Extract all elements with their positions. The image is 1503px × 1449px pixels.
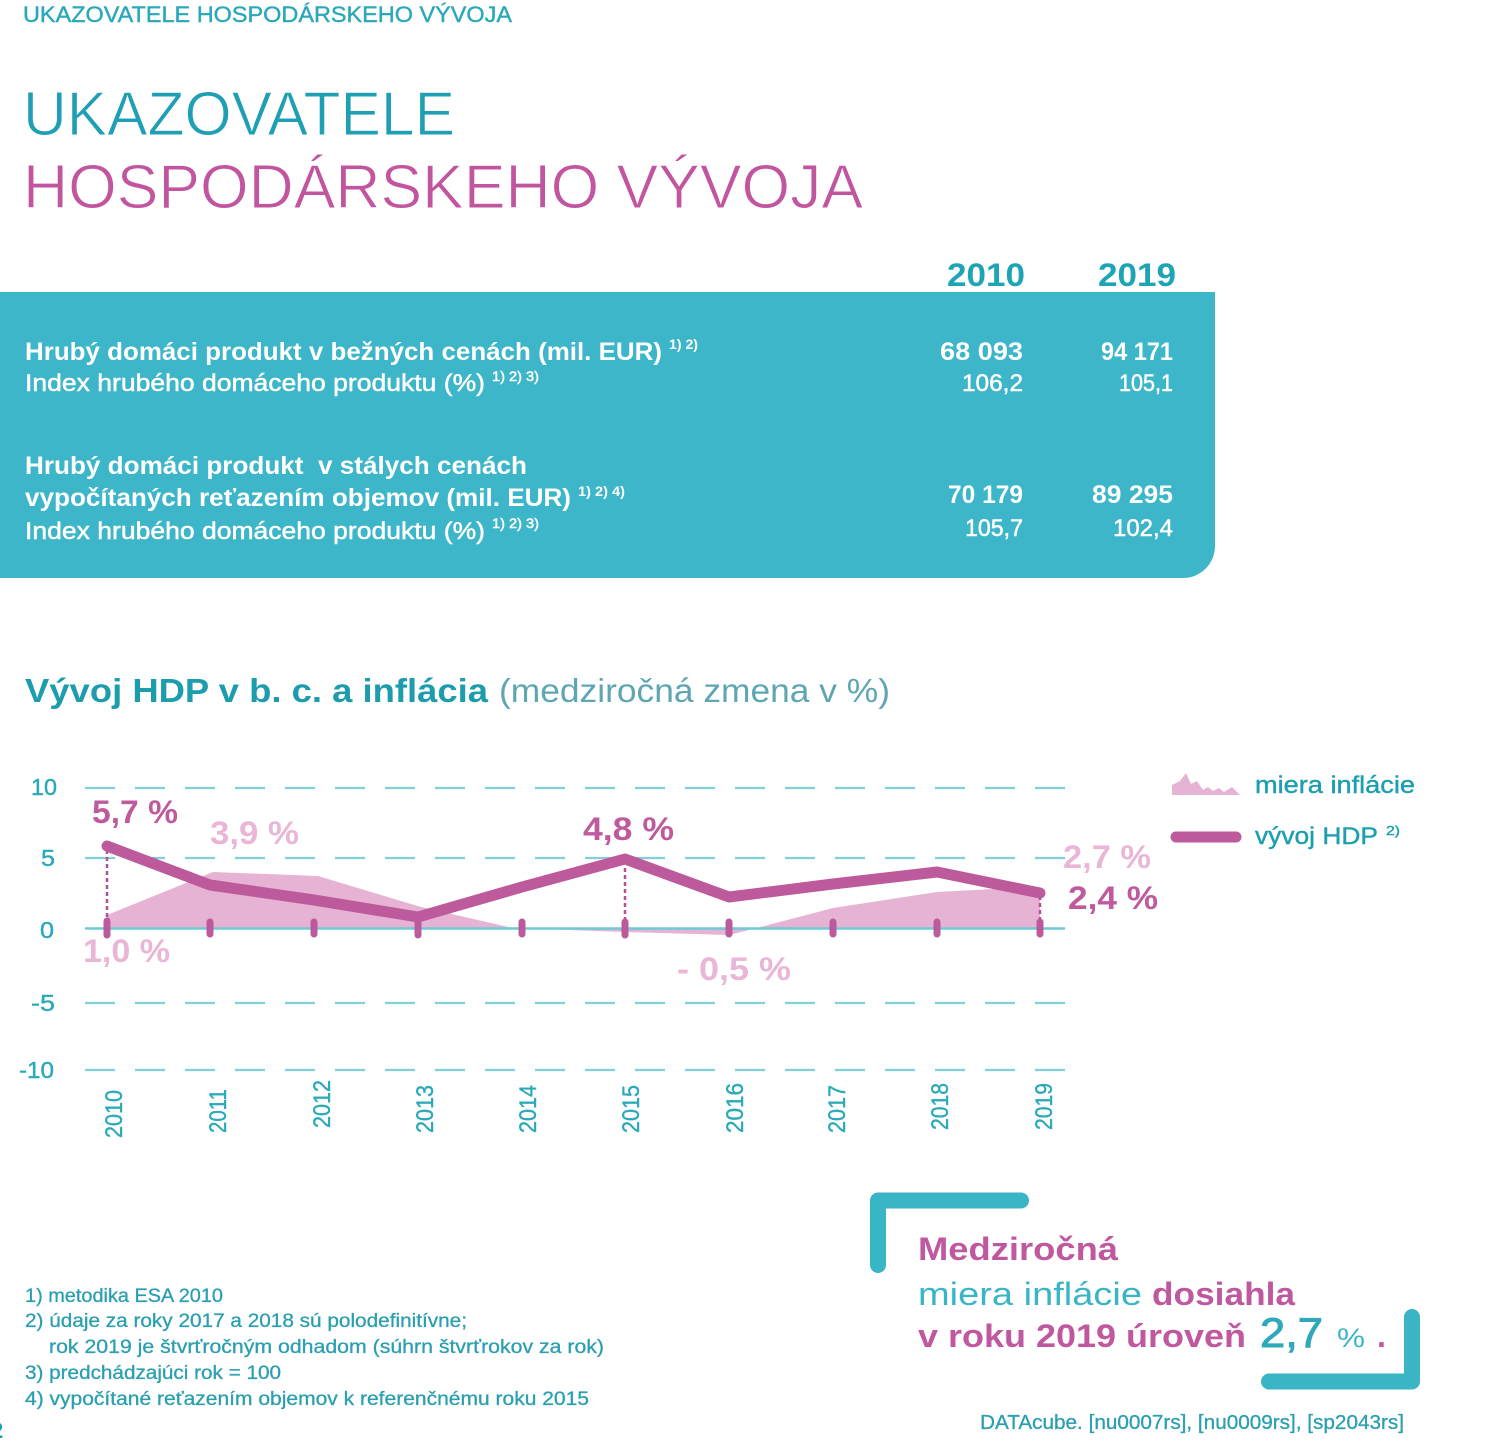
row: GDP at constant prices: vypočítaných reťazením objemov (mil. EUR) [25,484,571,512]
footnotes: 3) predchádzajúci rok = 100 [25,1363,281,1384]
row: GDP at current prices: 94 171 [1101,338,1173,366]
callout [878,1200,1412,1382]
row: GDP at constant prices: 70 179 [948,481,1023,509]
footnotes [25,1286,604,1410]
x axis years: 2015 [618,1085,645,1133]
legend icon: inflation [1172,773,1240,795]
panel: GDP table [0,292,1215,578]
title: UKAZOVATELE [23,80,455,149]
callout text: miera inflácie [918,1276,1142,1312]
row: GDP index, current prices: 1) 2) 3) [492,368,539,384]
row: GDP index, current prices: Index hrubého domáceho produktu (%) [25,370,485,397]
row: GDP at current prices [25,336,1173,366]
data labels: GDP: 2,4 % [1068,880,1158,916]
row: GDP at constant prices: 89 295 [1092,481,1173,509]
x axis years: 2018 [927,1083,954,1130]
x axis years [101,1080,1058,1138]
x axis years: 2011 [205,1089,232,1133]
row: GDP index, current prices [25,368,1173,397]
row: GDP at constant prices: Hrubý domáci produkt v stálych cenách [25,452,527,480]
legend label: inflation: miera inflácie [1255,772,1415,799]
row: GDP index, constant prices: 105,7 [965,515,1023,542]
row: GDP index, constant prices: 1) 2) 3) [492,515,539,531]
x axis years: 2013 [412,1085,439,1133]
y axis labels: 5 [41,845,55,871]
chart heading: (medziročná zmena v %) [499,672,890,709]
data labels: inflation: - 0,5 % [677,951,791,987]
table year headers: 2010 [947,257,1025,293]
x axis years: 2010 [101,1090,128,1138]
row: GDP index, current prices: 105,1 [1119,370,1173,397]
row: GDP at constant prices: 1) 2) 4) [578,483,625,499]
y axis labels: 10 [31,774,57,800]
callout text: v roku 2019 úroveň [918,1318,1246,1354]
x axis years: 2014 [515,1085,542,1133]
data labels: GDP: 4,8 % [583,811,674,847]
data labels: inflation: 3,9 % [210,815,299,851]
x axis years: 2019 [1031,1083,1058,1130]
data labels: inflation: 1,0 % [83,933,170,969]
inflation area [107,872,1040,935]
footnotes: 2) údaje za roky 2017 a 2018 sú polodefinitívne; [25,1311,467,1332]
running header: UKAZOVATELE HOSPODÁRSKEHO VÝVOJA [23,2,512,27]
footnotes: 4) vypočítané reťazením objemov k referenčnému roku 2015 [25,1389,589,1410]
chart heading [25,672,890,709]
callout text: 2,7 [1260,1309,1323,1356]
footnotes: rok 2019 je štvrťročným odhadom (súhrn štvrťrokov za rok) [49,1337,604,1358]
y axis labels [19,774,57,1083]
y axis labels: 0 [40,917,54,943]
legend label: GDP: 2) [1386,823,1400,838]
callout text: % [1337,1323,1365,1353]
callout text: . [1377,1318,1386,1354]
legend [1172,772,1415,850]
callout bracket: top left [878,1200,1021,1265]
GDP line [107,846,1040,917]
callout bracket: bottom right [1269,1317,1412,1382]
row: GDP index, constant prices: 102,4 [1113,515,1173,542]
callout text: dosiahla [1152,1276,1295,1312]
row: GDP at current prices: 1) 2) [669,336,698,352]
row: GDP at current prices: 68 093 [940,338,1023,366]
title [23,80,864,222]
y axis labels: -5 [31,990,55,1016]
data labels: inflation: 2,7 % [1063,839,1151,875]
row: GDP at constant prices [25,452,1173,512]
year tick marks [107,921,1040,935]
line and area chart [19,774,1158,1138]
x axis years: 2016 [722,1083,749,1133]
source note: DATAcube. [nu0007rs], [nu0009rs], [sp2043rs] [980,1412,1404,1434]
callout text [918,1231,1386,1356]
title: HOSPODÁRSKEHO VÝVOJA [23,153,864,222]
zero axis [85,927,1065,930]
row: GDP index, current prices: 106,2 [962,370,1023,397]
footnotes: 1) metodika ESA 2010 [25,1286,223,1307]
chart heading: Vývoj HDP v b. c. a inflácia [25,672,489,709]
legend icon: GDP [1176,832,1236,842]
data labels: inflation [83,815,1151,987]
y axis labels: -10 [19,1057,54,1083]
x axis years: 2017 [824,1085,851,1133]
row: GDP at current prices: Hrubý domáci produkt v bežných cenách (mil. EUR) [25,338,662,366]
row: GDP index, constant prices [25,515,1173,545]
legend label: GDP: vývoj HDP [1255,823,1378,850]
x axis years: 2012 [309,1080,336,1128]
table year headers [947,257,1176,293]
callout text: Medziročná [918,1231,1118,1267]
dotted drop lines [107,850,1040,925]
row: GDP index, constant prices: Index hrubého domáceho produktu (%) [25,518,485,545]
data labels: GDP: 5,7 % [92,794,178,830]
data labels: GDP [92,794,1158,916]
table year headers: 2019 [1098,257,1176,293]
